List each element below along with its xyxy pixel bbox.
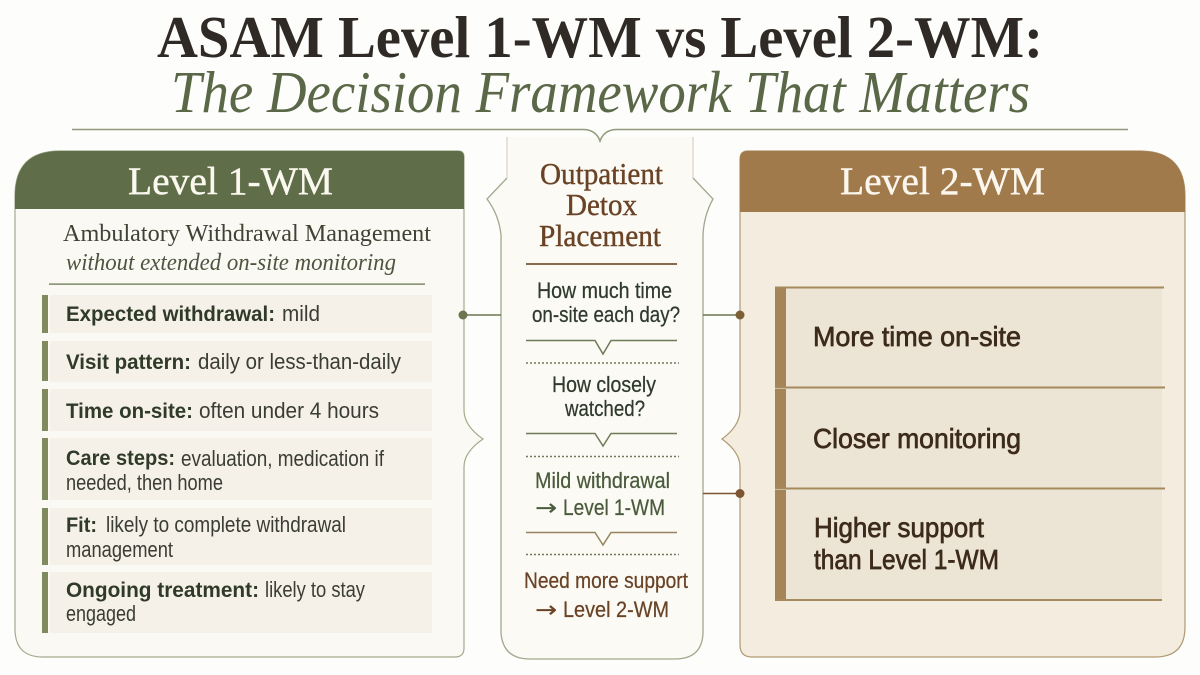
connector: center to right panel, bottom [703, 489, 744, 498]
row: time on-site: Time on-site: [66, 400, 193, 423]
connector: left panel to center [458, 310, 501, 320]
center heading: Outpatient [540, 156, 663, 191]
row: ongoing treatment [42, 572, 432, 633]
question: time on-site: on-site each day? [532, 302, 680, 327]
title: The Decision Framework That Matters [171, 59, 1030, 125]
row: expected withdrawal [42, 295, 432, 333]
connector: center to right panel, top [703, 310, 744, 320]
question: how closely watched: watched? [564, 396, 645, 421]
chevron divider 3 [526, 532, 677, 545]
question: how closely watched: How closely [552, 372, 656, 397]
row: care steps: needed, then home [66, 470, 223, 495]
row: higher support [775, 488, 1165, 601]
panel body: Level 2-WM [722, 151, 1185, 657]
row: closer monitoring [775, 386, 1165, 488]
header: Level 1-WM [15, 151, 464, 209]
chevron divider 2 [526, 434, 677, 446]
header: Level 2-WM [740, 151, 1185, 212]
row: closer monitoring: Closer monitoring [813, 423, 1021, 454]
panel: outpatient detox placement [487, 137, 713, 659]
question: time on-site [532, 278, 680, 327]
row: care steps: Care steps: [66, 447, 175, 470]
question: how closely watched [552, 372, 656, 421]
row: fit: management [66, 537, 173, 562]
row: higher support: than Level 1-WM [814, 544, 999, 575]
row: visit pattern: daily or less-than-daily [198, 349, 401, 374]
center heading: Detox [566, 187, 637, 222]
row: expected withdrawal: mild [282, 301, 320, 326]
center heading [539, 156, 663, 253]
row: ongoing treatment: Ongoing treatment: [66, 579, 259, 602]
header: Level 2-WM: Level 2-WM [840, 160, 1045, 203]
outcome: mild withdrawal: → [535, 496, 557, 521]
subtitle: Ambulatory Withdrawal Management [63, 221, 431, 247]
outcome: need more support [524, 568, 688, 623]
header: Level 1-WM: Level 1-WM [128, 160, 333, 203]
row: expected withdrawal: Expected withdrawal: [66, 303, 275, 326]
row: visit pattern [42, 341, 432, 382]
center heading: Placement [539, 218, 661, 253]
panel: Level 1-WM [15, 151, 483, 657]
row: ongoing treatment: likely to stay [265, 577, 365, 602]
title divider with notch [72, 130, 1128, 141]
row: more time on-site: More time on-site [813, 321, 1021, 352]
row: fit: likely to complete withdrawal [106, 512, 346, 537]
row: fit [42, 508, 432, 565]
subtitle [49, 221, 431, 285]
outcome: mild withdrawal: Level 1-WM [563, 495, 665, 520]
row: care steps [42, 438, 432, 500]
panel: Level 2-WM [722, 151, 1185, 657]
row: time on-site [42, 389, 432, 431]
row: care steps: evaluation, medication if [181, 446, 385, 471]
row: visit pattern: Visit pattern: [66, 351, 191, 374]
row: fit: Fit: [66, 514, 97, 537]
outcome: mild withdrawal: Mild withdrawal [535, 468, 670, 493]
panel body: Level 1-WM [15, 151, 483, 657]
outcome: need more support: → [535, 598, 557, 623]
center panel outline [487, 137, 713, 659]
outcome: need more support: Level 2-WM [563, 597, 669, 622]
question: time on-site: How much time [537, 278, 672, 303]
outcome: need more support: Need more support [524, 568, 688, 593]
subtitle: without extended on-site monitoring [66, 250, 396, 276]
row: ongoing treatment: engaged [66, 601, 136, 626]
row: time on-site: often under 4 hours [199, 398, 379, 423]
row: higher support: Higher support [814, 512, 984, 543]
chevron divider 1 [526, 340, 677, 354]
outcome: mild withdrawal [535, 468, 670, 521]
title: ASAM Level 1-WM vs Level 2-WM: [157, 4, 1043, 70]
row: more time on-site [775, 286, 1164, 387]
title [157, 4, 1043, 125]
